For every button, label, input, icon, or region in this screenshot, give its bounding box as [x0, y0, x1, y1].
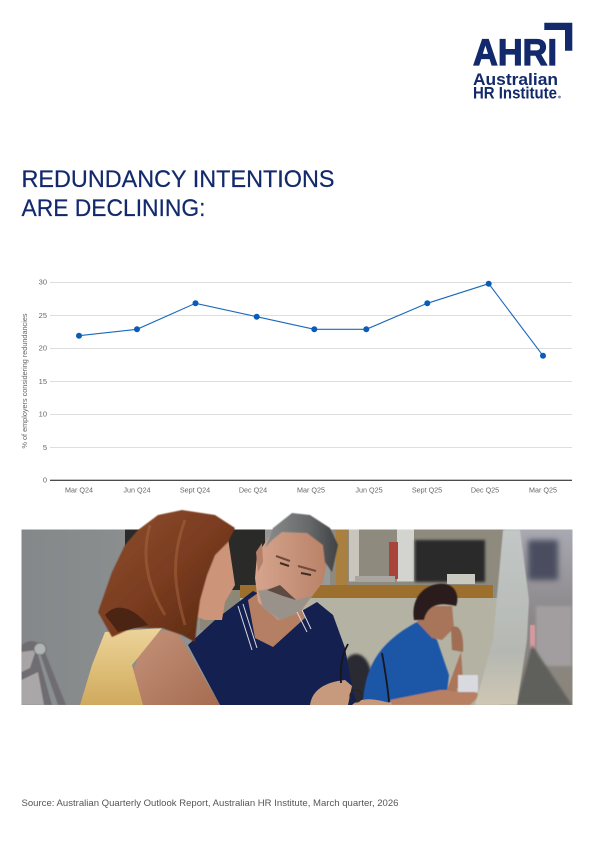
logo name line 2: HR Institute [473, 84, 557, 102]
logo bracket [544, 23, 572, 51]
x axis labels: Mar Q25 [297, 486, 325, 494]
x axis labels: Jun Q24 [123, 486, 151, 494]
dark chair behind the men [346, 652, 371, 702]
x axis labels: Sept Q25 [412, 486, 442, 494]
data points [76, 281, 546, 359]
title: ARE DECLINING: [22, 195, 206, 222]
background man in blue shirt [363, 584, 480, 705]
office background [22, 530, 572, 706]
source note: Source: Australian Quarterly Outlook Report, Australian HR Institute, March quarter, 2026 [22, 798, 398, 808]
x axis labels: Sept Q24 [180, 486, 210, 494]
x axis labels: Mar Q25 [529, 486, 557, 494]
x axis labels: Dec Q24 [239, 486, 267, 494]
logo name line 1: Australian [473, 71, 558, 89]
y axis labels: 20 [39, 344, 47, 352]
line chart: redundancy intentions [22, 278, 572, 494]
x axis labels: Jun Q25 [355, 486, 383, 494]
logo wordmark: AHRI [473, 31, 557, 73]
y axis title: % of employers considering redundancies [22, 313, 29, 448]
x axis labels [65, 486, 557, 494]
logo registered mark [558, 96, 561, 98]
x axis [50, 479, 572, 481]
x axis labels: Dec Q25 [471, 486, 499, 494]
logo: AHRI Australian HR Institute [473, 23, 572, 102]
y axis labels: 0 [43, 476, 47, 484]
office chair [22, 641, 66, 705]
y axis labels: 30 [39, 278, 47, 286]
woman with auburn hair [80, 510, 235, 705]
monitor [475, 530, 529, 705]
x axis labels: Mar Q24 [65, 486, 93, 494]
photo: colleagues in an office [22, 510, 572, 706]
title: REDUNDANCY INTENTIONS [22, 166, 334, 193]
title [22, 166, 334, 222]
y axis labels: 25 [39, 311, 47, 320]
man in navy polo [188, 513, 392, 705]
data line [79, 284, 543, 356]
y axis labels: 5 [43, 443, 47, 452]
y axis labels: 10 [39, 410, 47, 418]
y axis labels: 15 [39, 377, 47, 386]
y axis labels [39, 278, 47, 484]
